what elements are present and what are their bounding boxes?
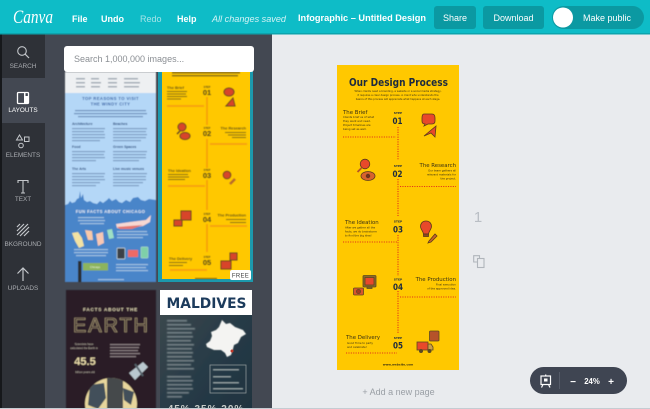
thumbnail: facts about the earth: calculated the Earth is xyxy=(70,346,98,350)
thumbnail: our design process (selected) xyxy=(158,65,253,282)
thumbnail: facts about the earth: EARTH xyxy=(73,315,148,337)
icon: monitor and camera xyxy=(354,276,376,295)
save status: All changes saved xyxy=(211,14,287,24)
step 1 text: they want and need. xyxy=(343,119,371,123)
step 1 text: Clients brief us of what xyxy=(343,115,374,119)
step 1 number: 01 xyxy=(392,117,402,127)
zoom control: + xyxy=(608,377,614,388)
badge: free: FREE xyxy=(232,274,249,280)
step 1 text: being set as well. xyxy=(343,127,367,131)
step 5 number: 05 xyxy=(393,342,403,352)
step 2 text: Our team gathers all xyxy=(428,168,456,172)
zoom control: 24% xyxy=(584,377,600,386)
thumbnail: facts about the earth: Scientists have xyxy=(75,342,94,346)
page number: 1 xyxy=(474,209,482,226)
thumbnail: our design process (selected): 04 xyxy=(203,215,212,224)
step 4 text xyxy=(415,277,456,290)
icon: speech bubble and paper plane xyxy=(422,114,436,137)
step 5 number: STEP xyxy=(394,336,403,340)
step 3 text: to find the big idea! xyxy=(345,234,372,238)
thumbnail: our design process (selected): The Brief xyxy=(167,85,185,90)
step 2 text: The Research xyxy=(419,163,456,169)
step 3 text: After we gather all the xyxy=(345,226,375,230)
thumbnail: our design process (selected): The Production xyxy=(217,212,247,218)
thumbnail: maldives xyxy=(160,290,252,409)
make public toggle: Make public xyxy=(583,13,632,23)
step 2 text: the project. xyxy=(441,176,456,180)
step 3 number: STEP xyxy=(394,220,403,224)
step 4 number: 04 xyxy=(393,283,403,293)
step 4 text: The Production xyxy=(415,277,456,283)
panel: sidebar xyxy=(0,34,45,409)
thumbnail: facts about the earth xyxy=(66,290,156,409)
step 3 text xyxy=(344,220,379,238)
thumbnail: our design process (selected): 03 xyxy=(203,171,211,180)
thumbnail: our design process (selected): STEP xyxy=(204,85,211,89)
add a new page: + Add a new page xyxy=(362,387,435,397)
badge: free xyxy=(230,270,251,280)
step 1 text: The Brief xyxy=(342,110,367,116)
search box xyxy=(64,46,254,72)
thumbnail: chicago infographic: Architecture xyxy=(72,122,93,126)
thumbnail: chicago infographic: Chicago xyxy=(90,265,101,269)
thumbnail: our design process (selected): 02 xyxy=(203,129,211,138)
nav: elements xyxy=(6,135,40,159)
nav: search xyxy=(10,47,37,70)
intro text xyxy=(355,89,442,101)
search box: Search 1,000,000 images... xyxy=(74,54,184,64)
nav: search: SEARCH xyxy=(10,63,37,70)
top toolbar xyxy=(0,0,650,34)
thumbnail: chicago infographic: Food xyxy=(72,145,81,149)
icon: light bulb and pencil xyxy=(420,221,437,243)
step 2 text: relevant materials for xyxy=(427,172,457,176)
intro text: it requires a clear design process. A client who understands the xyxy=(357,93,439,97)
step 1 number xyxy=(392,111,403,127)
nav: layouts: LAYOUTS xyxy=(8,107,38,114)
thumbnail: chicago infographic: Beaches xyxy=(113,122,127,126)
thumbnail: our design process (selected): 01 xyxy=(203,88,211,97)
download button xyxy=(483,6,544,29)
thumbnail: our design process (selected): 05 xyxy=(203,258,211,267)
thumbnail: chicago infographic xyxy=(65,72,156,282)
step 1 number: STEP xyxy=(394,111,403,115)
icon: presentation xyxy=(541,374,550,388)
thumbnail: chicago infographic: THE WINDY CITY xyxy=(91,102,130,106)
nav: elements: ELEMENTS xyxy=(6,152,40,159)
step 3 text: The Ideation xyxy=(344,220,379,226)
step 2 text xyxy=(419,163,457,180)
thumbnail: our design process (selected): The Delivery xyxy=(169,256,193,261)
nav: layouts xyxy=(8,92,38,114)
step 5 text: and celebrate! xyxy=(347,345,367,349)
menu: File xyxy=(72,14,88,24)
step 2 number xyxy=(392,164,403,180)
step 4 number: STEP xyxy=(394,278,403,282)
menu: Redo xyxy=(140,14,162,24)
connectors xyxy=(343,127,456,353)
thumbnail: our design process (selected): STEP xyxy=(204,168,211,172)
download button: Download xyxy=(493,13,534,23)
step 4 number xyxy=(393,278,403,293)
thumbnail: chicago infographic: FUN FACTS ABOUT CHICAGO xyxy=(76,209,146,214)
step 5 text: Good Time to party xyxy=(347,341,373,345)
thumbnail: our design process (selected): STEP xyxy=(204,212,211,216)
step 5 number xyxy=(393,336,403,352)
thumbnail: our design process (selected): STEP xyxy=(204,126,211,130)
nav: uploads xyxy=(8,268,38,292)
step 3 number xyxy=(393,220,403,236)
thumbnail: chicago infographic: Live music venues xyxy=(113,167,144,171)
thumbnail: facts about the earth: billion years old xyxy=(75,370,95,374)
nav: uploads: UPLOADS xyxy=(8,285,38,292)
logo: Canva xyxy=(13,7,53,28)
menu: Undo xyxy=(101,14,124,24)
nav: background: BKGROUND xyxy=(5,241,42,248)
thumbnail: our design process (selected): The Research xyxy=(220,126,247,130)
menu: Help xyxy=(177,14,197,24)
title: Our Design Process xyxy=(349,77,448,89)
thumbnail: chicago infographic: TOP REASONS TO VISIT xyxy=(82,96,139,101)
thumbnail: facts about the earth: 45.5 xyxy=(74,356,96,368)
nav: text xyxy=(15,180,31,203)
make public toggle xyxy=(552,6,644,29)
step 2 number: STEP xyxy=(394,164,403,168)
step 5 text xyxy=(345,335,381,349)
menu xyxy=(72,14,197,24)
thumbnail: maldives: MALDIVES xyxy=(166,296,246,312)
document title: Infographic – Untitled Design xyxy=(298,13,426,23)
thumbnail: chicago infographic: Green Spaces xyxy=(113,145,136,149)
website footer: www.website.com xyxy=(383,362,413,366)
share button xyxy=(434,6,476,29)
step 1 text xyxy=(342,110,374,131)
step 3 number: 03 xyxy=(393,226,403,236)
icon: truck and parcel xyxy=(417,331,439,353)
infographic page: our design process xyxy=(337,65,459,370)
share button: Share xyxy=(443,13,467,23)
step 5 text: The Delivery xyxy=(345,335,381,341)
thumbnail: chicago infographic: The Arts xyxy=(72,167,86,171)
nav: background xyxy=(5,224,42,248)
step 1 text: Project timelines are xyxy=(343,123,371,127)
thumbnail: facts about the earth: FACTS ABOUT THE xyxy=(83,307,138,312)
step 3 text: facts, we do brainstorm xyxy=(345,230,377,234)
panel: template library xyxy=(45,34,272,409)
thumbnail: our design process (selected): STEP xyxy=(204,255,211,259)
step 2 number: 02 xyxy=(392,170,402,180)
thumbnail: our design process (selected): The Ideation xyxy=(168,168,192,173)
step 4 text: Final execution xyxy=(436,282,456,286)
zoom control: − xyxy=(570,377,576,388)
zoom control xyxy=(530,367,627,394)
step 4 text: of the approved idea. xyxy=(427,286,456,290)
intro text: basics of this process will appreciate what happens at each stage. xyxy=(356,97,440,101)
intro text: When clients need a branding, a website or a social media strategy, xyxy=(355,89,442,93)
icon: magnifier and eye xyxy=(358,159,375,180)
bottom edge xyxy=(0,408,650,409)
icon: copy page xyxy=(474,256,484,268)
nav: text: TEXT xyxy=(15,196,31,203)
canvas background xyxy=(272,34,650,409)
